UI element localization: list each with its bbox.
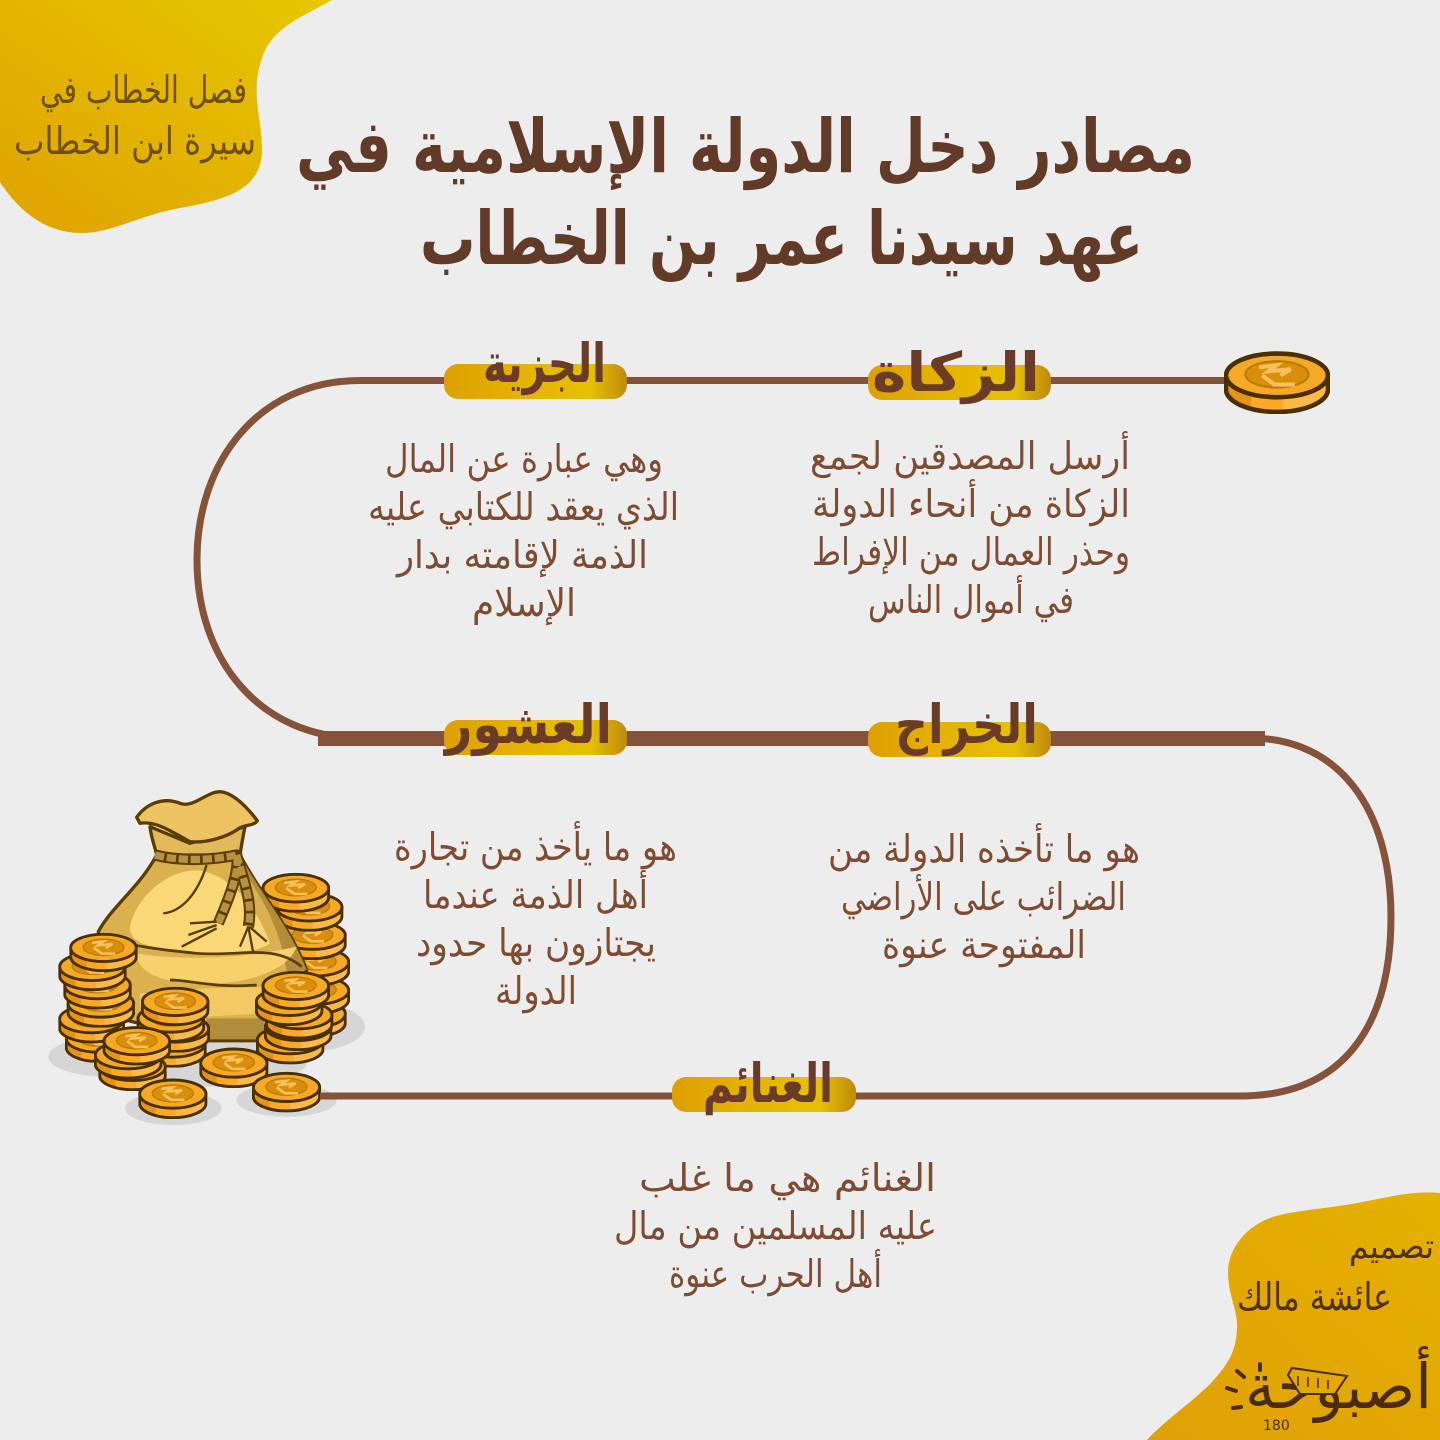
ushur body text: أهل الذمة عندما bbox=[423, 870, 648, 917]
sack bbox=[98, 792, 307, 1041]
kharaj body text: الضرائب على الأراضي bbox=[841, 873, 1126, 920]
logo: أصبوحة bbox=[1245, 1346, 1432, 1423]
single coins bbox=[140, 1049, 320, 1118]
section: jizya: الجزية bbox=[483, 332, 606, 395]
zakat body text: أرسل المصدقين لجمع bbox=[810, 431, 1130, 479]
ushur body text: هو ما يأخذ من تجارة bbox=[394, 821, 677, 870]
zakat body text: في أموال الناس bbox=[868, 575, 1074, 623]
designer credit: عائشة مالك bbox=[1237, 1275, 1392, 1319]
illustration: money bag and coins bbox=[48, 792, 365, 1125]
icon: starting coin bbox=[1226, 354, 1328, 412]
ushur body text: الدولة bbox=[495, 969, 577, 1014]
zakat body text: الزكاة من أنحاء الدولة bbox=[812, 479, 1130, 527]
section: jizya bbox=[368, 332, 679, 626]
ushur body text bbox=[394, 821, 677, 1014]
logo: 180 bbox=[1263, 1418, 1290, 1434]
title bbox=[296, 104, 1195, 283]
book name text: فصل الخطاب في bbox=[40, 68, 247, 112]
section: ushur: العشور bbox=[442, 693, 612, 756]
designer credit: تصميم bbox=[1349, 1227, 1434, 1267]
jizya body text: الذمة لإقامته بدار bbox=[395, 533, 648, 578]
back coin stack bbox=[263, 874, 349, 1037]
zakat body text bbox=[810, 431, 1130, 623]
front left coin stack bbox=[95, 1028, 170, 1090]
ghanaim body text bbox=[614, 1156, 937, 1297]
right front coin stack bbox=[256, 972, 332, 1063]
section: zakat bbox=[810, 341, 1130, 623]
path connector bbox=[197, 380, 1391, 1096]
centre coin stack bbox=[138, 988, 209, 1066]
jizya body text: وهي عبارة عن المال bbox=[385, 437, 663, 482]
kharaj body text: المفتوحة عنوة bbox=[882, 923, 1086, 968]
bottom-right blob bbox=[1147, 1192, 1440, 1440]
jizya body text: الإسلام bbox=[472, 581, 576, 626]
ushur body text: يجتازون بها حدود bbox=[416, 921, 656, 966]
title: عهد سيدنا عمر بن الخطاب bbox=[420, 196, 1143, 283]
designer credit bbox=[1237, 1227, 1434, 1319]
ghanaim body text: الغنائم هي ما غلب bbox=[639, 1156, 936, 1200]
section: ghanaim: الغنائم bbox=[703, 1052, 833, 1115]
jizya body text: الذي يعقد للكتابي عليه bbox=[368, 485, 679, 529]
left coin stack bbox=[60, 934, 136, 1061]
ghanaim body text: أهل الحرب عنوة bbox=[669, 1249, 882, 1297]
kharaj body text: هو ما تأخذه الدولة من bbox=[828, 823, 1140, 872]
ghanaim body text: عليه المسلمين من مال bbox=[614, 1204, 937, 1249]
section: ushur bbox=[394, 693, 677, 1014]
section: zakat: الزكاة bbox=[872, 341, 1040, 404]
section: ghanaim bbox=[614, 1052, 937, 1297]
title: مصادر دخل الدولة الإسلامية في bbox=[296, 104, 1195, 191]
rope bbox=[155, 855, 250, 927]
section: kharaj bbox=[828, 693, 1140, 968]
jizya body text bbox=[368, 437, 679, 626]
top-left blob bbox=[0, 0, 332, 233]
kharaj body text bbox=[828, 823, 1140, 968]
zakat body text: وحذر العمال من الإفراط bbox=[812, 530, 1130, 575]
ground shadows bbox=[48, 1002, 365, 1125]
book name text bbox=[14, 68, 256, 164]
book name text: سيرة ابن الخطاب bbox=[14, 119, 256, 164]
section: kharaj: الخراج bbox=[895, 693, 1038, 756]
